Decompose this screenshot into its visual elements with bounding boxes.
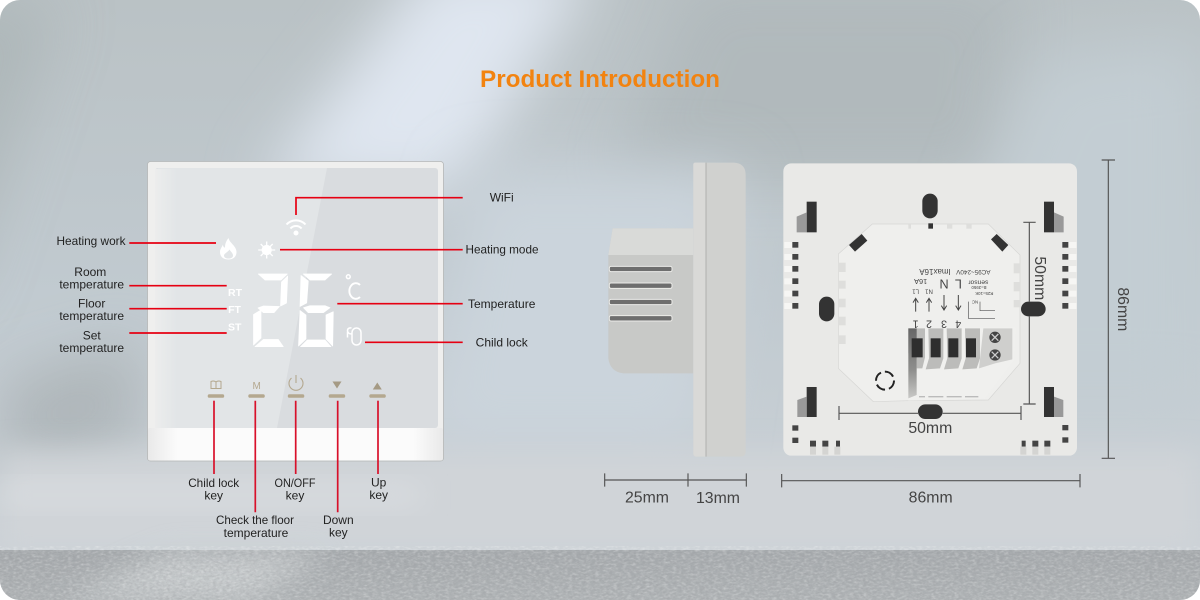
title: Product Introduction [480,66,720,93]
housing clips [849,223,1008,252]
device bottom band [148,428,443,460]
terminal numbers: 3 [941,317,947,329]
icon: wifi [286,220,306,234]
dimension: 25mm 13mm: 13mm [696,490,740,507]
terminal legends: L [955,277,962,291]
key: up [369,382,386,398]
terminal legends: AC95~240V [955,268,990,275]
bottom labels: Check the floor [216,513,294,527]
key: down [329,382,345,398]
dimension: 86mm vertical [1102,160,1131,458]
terminal legends: sensor [968,278,988,285]
knockout circle [876,372,894,390]
side vents [784,242,1076,455]
left labels: Heating work [56,234,126,248]
bottom labels: ON/OFF [274,476,316,490]
key: mode M: M [253,381,261,392]
bottom labels [188,476,388,540]
dimension: 25mm 13mm: 25mm [625,489,669,506]
device frame [148,162,444,461]
bottom labels: temperature [224,526,289,540]
dimension: 50mm horizontal: 50mm [908,420,952,437]
left labels: Floor [78,296,105,310]
panel: back view [782,160,1131,506]
key: mode M [248,381,265,398]
right labels [466,190,539,350]
mounting holes [819,194,1046,419]
FT label: FT [228,304,241,316]
left labels: Room [74,265,106,279]
bottom labels: Child lock [188,476,240,490]
left labels: Set [83,328,101,342]
terminal legends: 16A [914,277,927,286]
terminal legends: B=3950 [971,285,987,290]
bottom labels: key [286,488,304,502]
panel: side view [605,163,746,507]
key: child lock book [208,381,224,398]
bottom labels: key [369,488,388,502]
key: power [288,375,304,398]
relay schematic [968,302,995,318]
terminal legends: NC [972,299,978,304]
rear body [608,228,693,373]
right labels: WiFi [490,190,514,204]
terminal numbers: 2 [926,317,932,329]
terminal arrows [913,295,961,312]
dimension: 86mm horizontal [782,474,1080,506]
terminal screws [989,332,1001,361]
callout lines [129,198,463,512]
terminal numbers [913,317,961,329]
terminal numbers: 1 [913,317,919,329]
bottom labels: key [329,526,348,540]
vent slots [609,266,672,321]
seven segment digit 6 [298,274,333,347]
right labels: Child lock [476,336,529,350]
terminal legends: R25=10K [975,291,993,296]
right labels: Temperature [468,297,536,311]
RT label: RT [228,287,243,299]
dimension: 86mm vertical: 86mm [1114,287,1131,331]
dimension: 25mm 13mm [605,473,746,507]
left labels: temperature [59,278,124,292]
dimension: 86mm horizontal: 86mm [909,489,953,506]
icon: child lock [348,328,361,345]
terminal block [908,327,1016,401]
left labels [56,234,126,355]
left labels: temperature [59,309,124,323]
right labels: Heating mode [466,242,539,256]
front plate [693,163,746,457]
terminal legends [912,267,993,304]
terminal legends: L1 [912,288,919,294]
housing edge tabs [839,224,1020,344]
terminal legends: N1 [925,288,933,294]
dimension: 50mm vertical: 50mm [1031,256,1048,300]
icon: flame [220,238,236,260]
bottom labels: key [204,488,223,502]
panel: thermostat front [148,162,444,461]
dimension: 50mm vertical [1023,222,1048,404]
ST label: ST [228,322,242,334]
mounting clips [797,202,1064,417]
touch screen [155,168,438,428]
seven segment digit 2 [254,274,288,347]
terminal numbers: 4 [955,317,961,329]
dimension: 50mm horizontal [839,406,1021,437]
bottom labels: Down [323,513,354,527]
circuit housing [838,224,1020,402]
bottom labels: Up [371,476,387,490]
icon: sun [258,242,275,258]
terminal legends: N [939,277,949,291]
terminal legends: Imax16A [919,267,951,276]
left labels: temperature [59,341,124,355]
unit: degrees C [346,275,360,299]
back plate [783,163,1077,456]
